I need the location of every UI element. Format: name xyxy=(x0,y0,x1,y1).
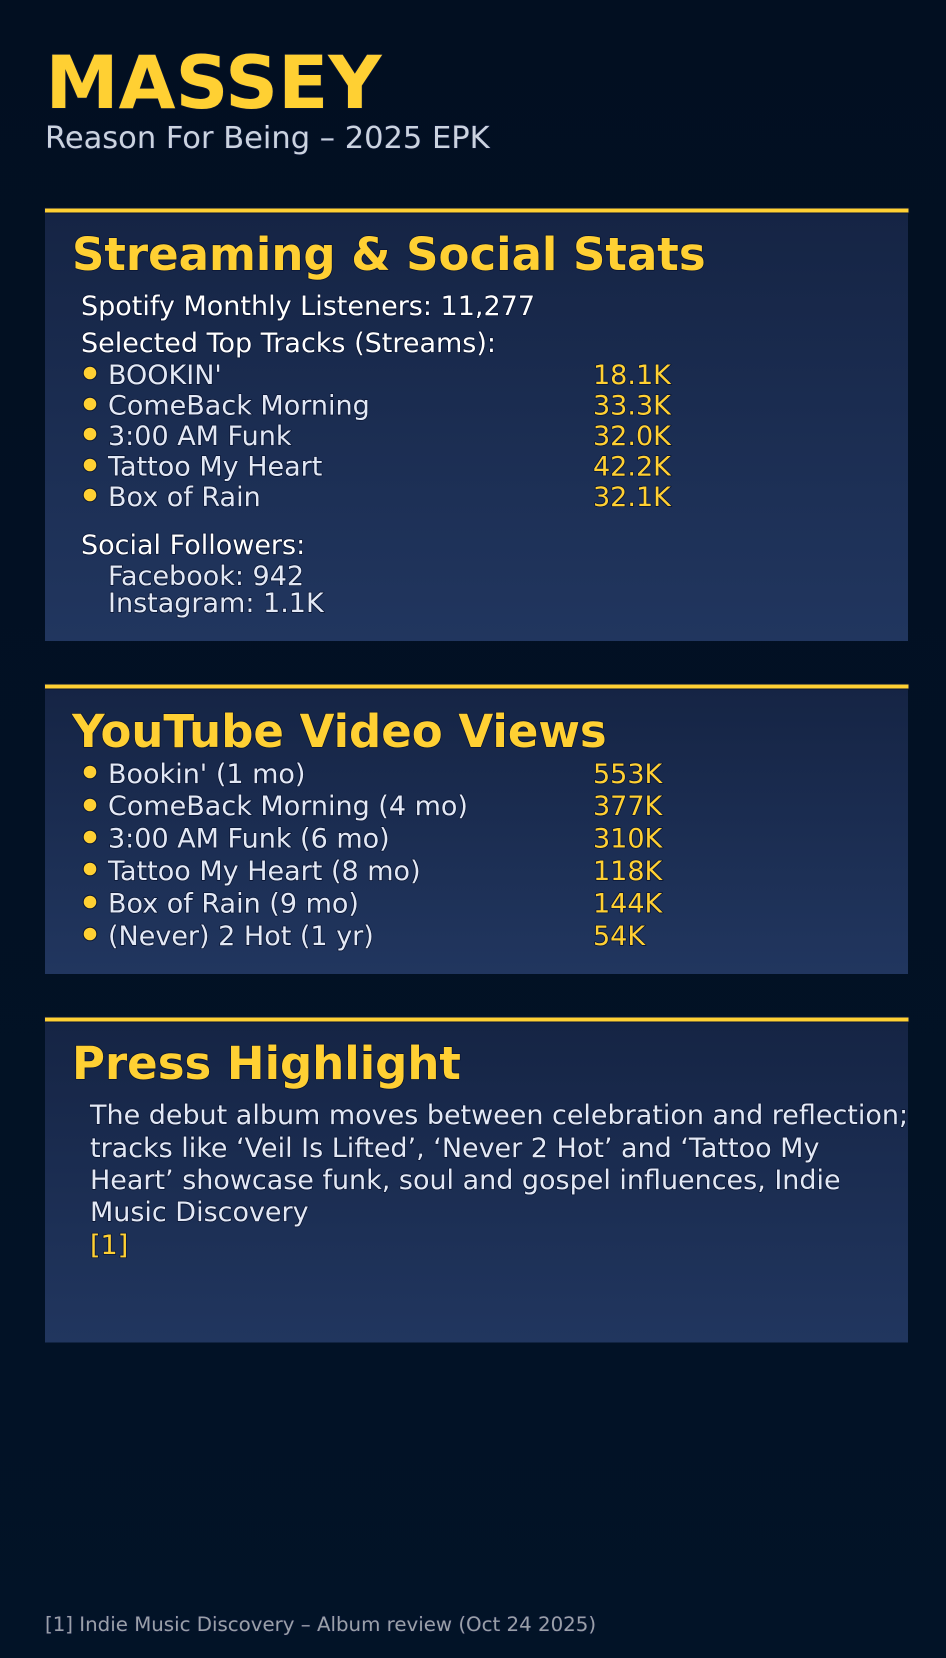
video list: Box of Rain (9 mo) xyxy=(108,888,359,920)
footnote: [1] Indie Music Discovery – Album review (Oct 24 2025) xyxy=(45,1613,596,1636)
press quote: The debut album moves between celebration and reflection; xyxy=(89,1100,908,1131)
social followers xyxy=(81,530,325,619)
video list: 553K xyxy=(593,759,664,790)
heading: streaming and social stats: Streaming & Social Stats xyxy=(72,228,706,281)
top tracks list: BOOKIN' xyxy=(108,360,222,391)
press quote xyxy=(89,1100,908,1228)
title: MASSEY xyxy=(46,41,382,126)
top tracks list: ComeBack Morning xyxy=(108,390,370,422)
press quote: Heart’ showcase funk, soul and gospel influences, Indie xyxy=(90,1165,841,1196)
panel: streaming and social stats xyxy=(44,208,909,641)
video list: Bookin' (1 mo) xyxy=(108,759,305,790)
top tracks list: 3:00 AM Funk xyxy=(108,421,292,452)
social followers: Social Followers: xyxy=(81,530,305,561)
panel: youtube video views xyxy=(44,684,909,974)
video list: 377K xyxy=(593,791,664,822)
heading: press highlight: Press Highlight xyxy=(72,1037,461,1090)
social followers: Instagram: 1.1K xyxy=(108,588,325,619)
header xyxy=(45,41,491,156)
heading: youtube video views: YouTube Video Views xyxy=(71,705,607,758)
video list xyxy=(83,759,664,952)
top tracks list: Box of Rain xyxy=(108,482,261,513)
video list: Tattoo My Heart (8 mo) xyxy=(107,856,421,887)
video list: 144K xyxy=(593,888,664,920)
top tracks list: Tattoo My Heart xyxy=(107,452,322,482)
subtitle: Reason For Being – 2025 EPK xyxy=(45,121,491,156)
top tracks list xyxy=(83,360,672,513)
video list: 310K xyxy=(593,824,664,854)
video list: 54K xyxy=(593,921,646,952)
panel: press highlight xyxy=(44,1017,909,1342)
video list: 118K xyxy=(593,856,664,887)
video list: (Never) 2 Hot (1 yr) xyxy=(108,921,374,952)
social followers: Facebook: 942 xyxy=(108,561,304,592)
press quote: Music Discovery xyxy=(90,1197,309,1228)
top tracks list: 32.0K xyxy=(593,421,672,452)
top tracks list: 18.1K xyxy=(593,360,672,391)
top tracks list: 42.2K xyxy=(593,452,672,482)
press quote: tracks like ‘Veil Is Lifted’, ‘Never 2 Hot’ and ‘Tattoo My xyxy=(90,1133,819,1164)
top tracks list: 33.3K xyxy=(593,390,672,422)
video list: ComeBack Morning (4 mo) xyxy=(108,791,468,822)
citation marker: [1] xyxy=(90,1230,128,1261)
spotify listeners: Spotify Monthly Listeners: 11,277 xyxy=(81,291,535,322)
top tracks label: Selected Top Tracks (Streams): xyxy=(81,328,496,359)
top tracks list: 32.1K xyxy=(593,482,672,513)
video list: 3:00 AM Funk (6 mo) xyxy=(108,824,390,854)
